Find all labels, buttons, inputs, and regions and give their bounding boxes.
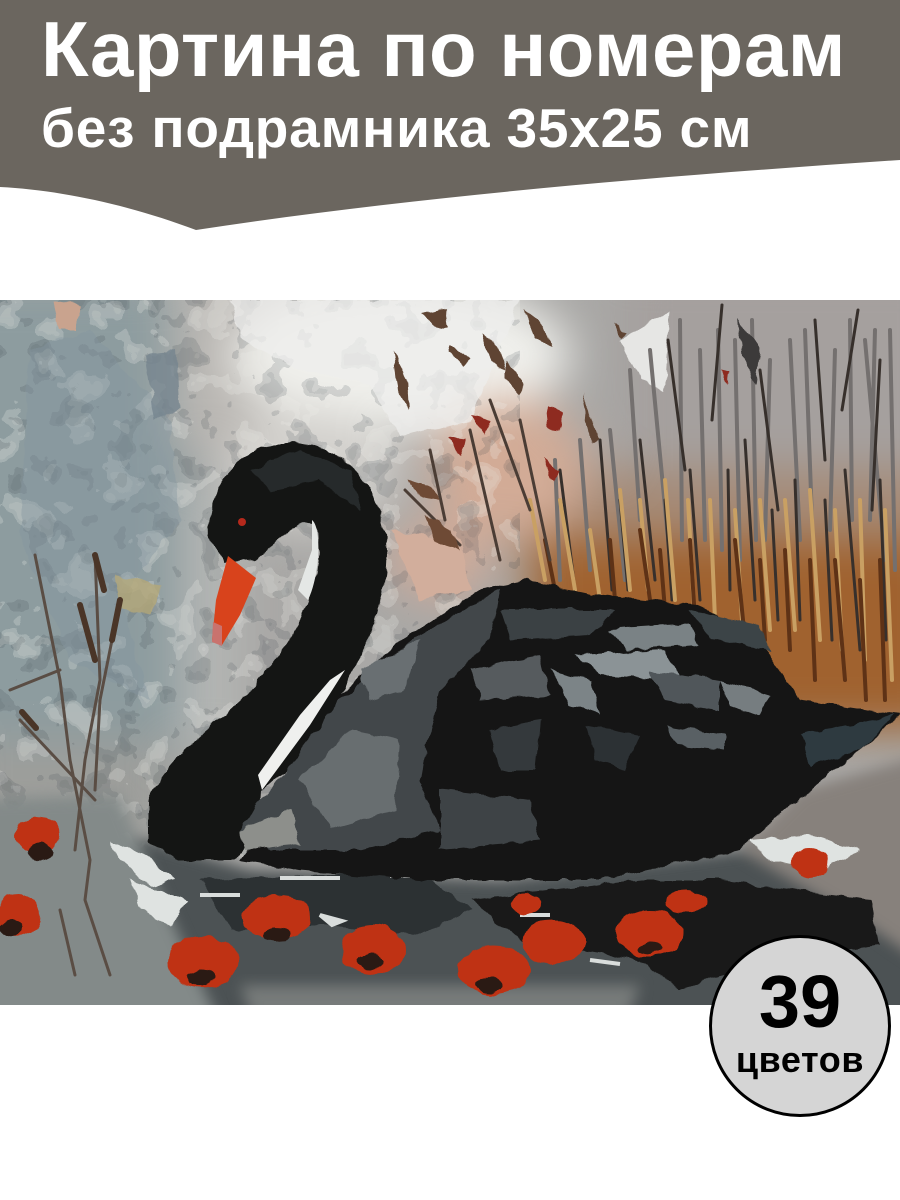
head highlights [250,450,360,510]
dark stems [560,305,886,650]
cattail heads [392,310,760,550]
feather highlights [240,590,895,850]
painting: black swan on a lake [0,300,900,1005]
grey stems [555,320,895,580]
red poppies [0,817,828,994]
swan [148,442,900,880]
swan beak [212,518,256,646]
painting background [0,300,900,888]
badge number: 39 [759,960,841,1043]
reeds [405,305,895,700]
left foreground branches [10,555,120,975]
header banner [0,0,900,230]
white highlight beside the neck [258,670,345,790]
sky and mist patches [20,300,670,700]
painterly blotches [0,300,520,860]
golden stems [530,480,892,680]
water [0,750,900,1045]
badge label: цветов [736,1039,864,1080]
brown stems [545,530,885,700]
swan body [240,580,900,880]
badge: 39 colours [709,935,891,1117]
swan neck and head [148,442,387,860]
subtitle: без подрамника 35х25 см [41,97,752,159]
title: Картина по номерам [41,5,846,93]
